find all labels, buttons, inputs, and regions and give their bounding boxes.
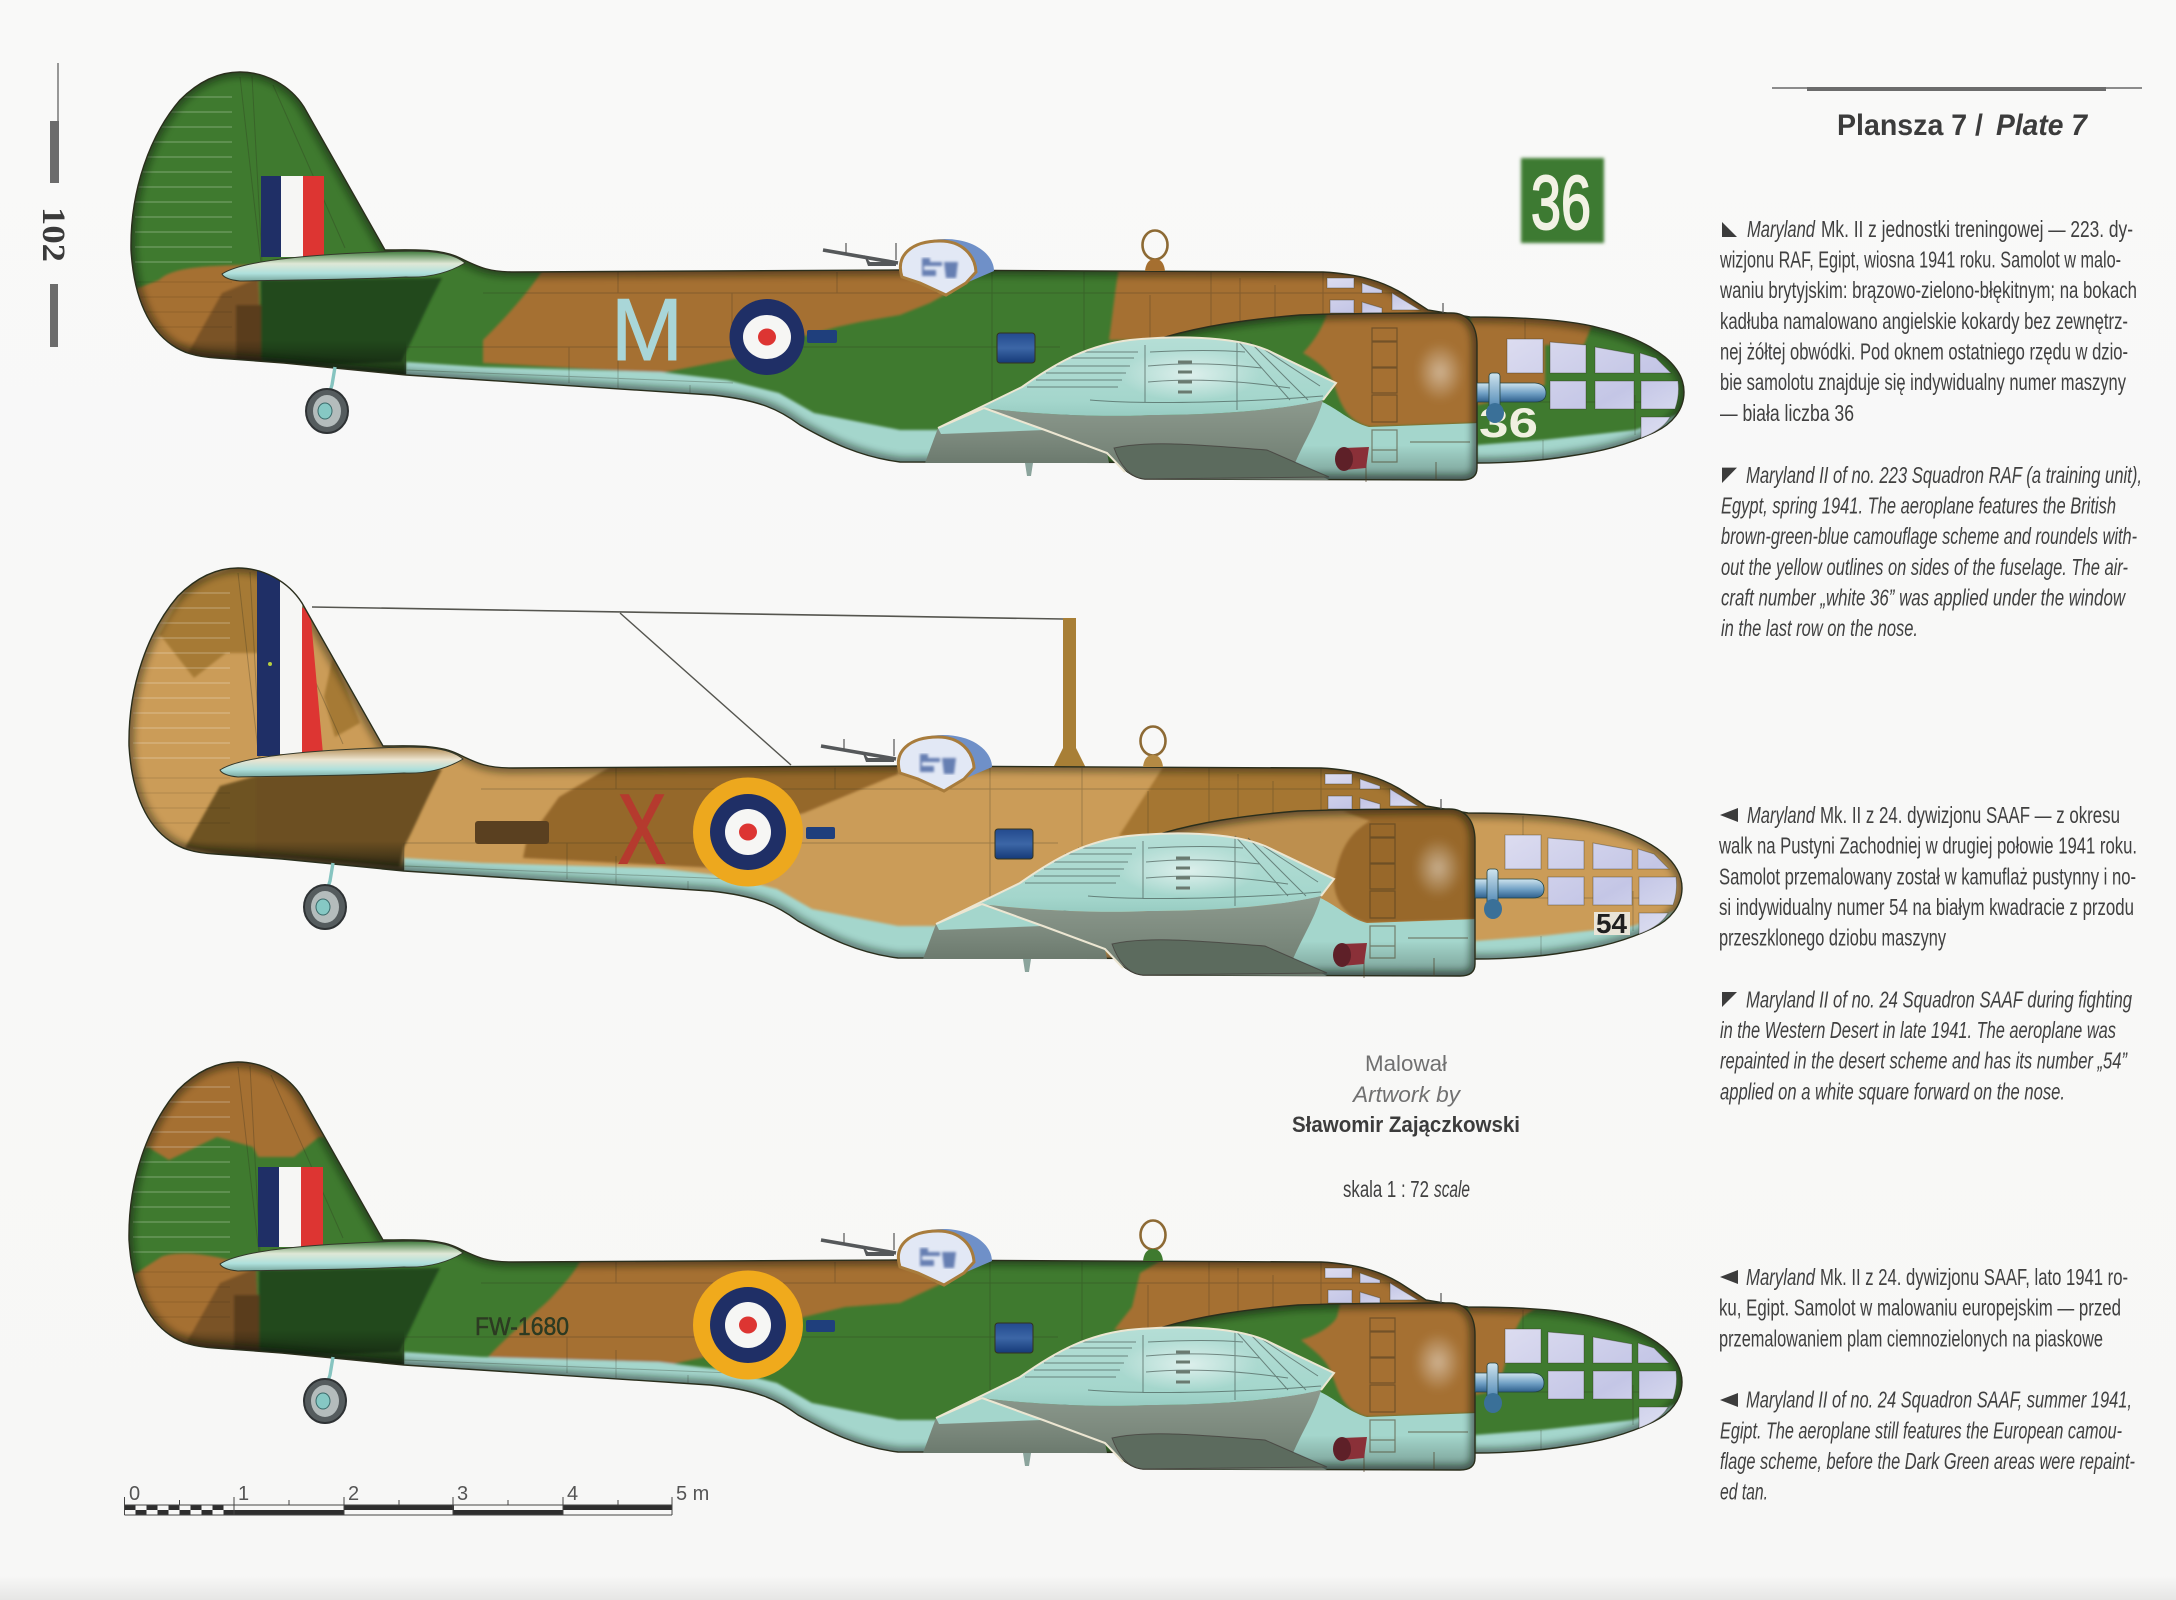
engine nacelle (1058, 1295, 1478, 1475)
nose number 54 on white square: 54 (1596, 908, 1627, 939)
engine nacelle (1058, 801, 1478, 981)
page number with side bars: 102 (35, 207, 71, 262)
scale note: skala 1 : 72 (1343, 1176, 1429, 1202)
antenna base (1145, 259, 1165, 271)
fin flash (261, 176, 324, 257)
fuselage and fin camouflage (132, 72, 1684, 462)
metric scale bar: 2 (348, 1483, 359, 1505)
text: English description, aircraft 3 (1720, 1387, 2135, 1505)
title: Plate 7 (1996, 109, 2088, 142)
green detail badge with number 36: 36 (1531, 161, 1591, 246)
engine nacelle (1060, 305, 1480, 485)
fuselage code letter M: M (611, 280, 683, 379)
nose number 36: 36 (1479, 399, 1538, 446)
text: Polish description, aircraft 2: Maryland (1747, 802, 1816, 828)
metric scale bar: 5 m (676, 1483, 709, 1505)
wire antenna and mast (312, 607, 1086, 768)
text: Polish description, aircraft 3 (1719, 1264, 2128, 1351)
title (1837, 109, 2088, 142)
page number with side bars (35, 63, 71, 347)
text: Polish description, aircraft 3: Maryland (1746, 1264, 1816, 1290)
text: Polish description, aircraft 1: Maryland (1747, 216, 1816, 242)
text: English description, aircraft 3: ed tan. (1720, 1479, 1768, 1505)
artwork credit (1292, 1051, 1520, 1137)
title: Plansza 7 / (1837, 109, 1984, 142)
fuselage roundel with yellow ring (693, 1270, 835, 1380)
artwork credit: Malował (1365, 1051, 1447, 1076)
antenna base (1143, 755, 1163, 767)
fuselage and fin camouflage (130, 568, 1682, 958)
text: Polish description, aircraft 2: przeszklonego dziobu maszyny (1719, 925, 1946, 951)
serial FW-1680: FW-1680 (475, 1313, 569, 1341)
text: English description, aircraft 2 (1720, 986, 2132, 1104)
fuselage and fin camouflage (130, 1062, 1682, 1452)
artwork credit: Artwork by (1351, 1082, 1462, 1107)
aircraft 2: Maryland desert scheme, X, 54 (128, 567, 1683, 978)
metric scale bar: 0 (129, 1483, 140, 1505)
antenna base (1143, 1249, 1163, 1261)
metric scale bar: 4 (567, 1483, 578, 1505)
text: English description, aircraft 1 (1721, 462, 2142, 641)
text: Polish description, aircraft 1 (1719, 216, 2137, 426)
text: Polish description, aircraft 2 (1718, 802, 2137, 951)
text: Polish description, aircraft 1: — biała liczba 36 (1720, 400, 1854, 426)
text: English description, aircraft 1: in the last row on the nose. (1721, 615, 1918, 641)
scale note: scale (1434, 1176, 1470, 1202)
full-height rudder stripes (257, 566, 323, 756)
metric scale bar: 1 (238, 1483, 249, 1505)
metric scale bar (124, 1483, 709, 1515)
fuselage roundel (730, 299, 837, 375)
dark code rectangle (475, 821, 549, 844)
tailplane (222, 251, 465, 281)
artwork credit: Sławomir Zajączkowski (1292, 1112, 1520, 1137)
aircraft 3: Maryland European scheme, FW-1680 (128, 1061, 1683, 1472)
header rule (1772, 87, 2142, 91)
fuselage roundel with yellow ring (693, 778, 835, 886)
fin flash (258, 1167, 323, 1247)
aircraft 1: Maryland green-brown, M (130, 71, 1685, 482)
tailplane (220, 747, 463, 777)
tailplane (220, 1241, 463, 1271)
fuselage code letter X: X (618, 774, 666, 884)
metric scale bar: 3 (457, 1483, 468, 1505)
